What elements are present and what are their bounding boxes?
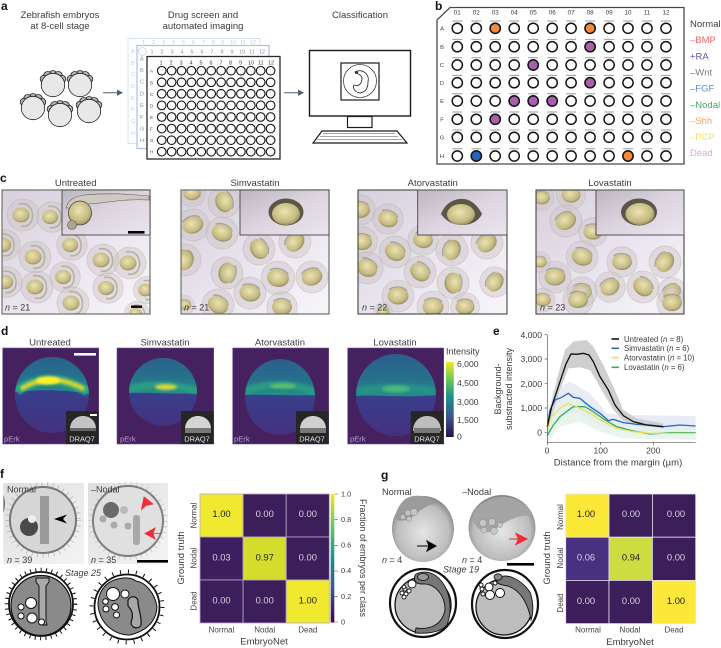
- heading: lovastatin: Lovastatin: [588, 178, 632, 189]
- legend: intensity colour bar: 1,500: [457, 415, 479, 425]
- row labels: Normal: [190, 502, 198, 528]
- image: pErk untreated: [3, 348, 99, 444]
- wells: [452, 23, 671, 161]
- column labels: [454, 10, 670, 16]
- front well plate: 2: [170, 60, 173, 66]
- label: –Nodal: [462, 487, 491, 497]
- image: atorvastatin embryos: [358, 190, 508, 314]
- panel: c, brightfield embryos: [0, 176, 684, 315]
- pErk label: pErk: [234, 434, 250, 444]
- column labels: 04: [511, 10, 518, 16]
- back well plate: 1: [142, 40, 145, 46]
- y axis title: Ground truth: [176, 531, 187, 585]
- row labels: C: [440, 63, 444, 69]
- confusion matrix: [200, 494, 329, 623]
- middle well plate: 12: [259, 50, 265, 56]
- chart legend: Atorvastatin (n = 10): [624, 354, 695, 362]
- confusion matrix: 1.00: [577, 508, 595, 519]
- y axis title: Ground truth: [542, 531, 553, 585]
- column labels: Nodal: [254, 626, 275, 634]
- back well plate: C: [131, 72, 135, 78]
- panel: b, screen plate results: [435, 0, 721, 164]
- colour bar title: Fraction of embryos per class: [358, 499, 368, 618]
- middle well plate: 6: [200, 50, 204, 56]
- middle well plate: 3: [170, 50, 174, 56]
- middle well plate: G: [140, 126, 144, 132]
- legend: intensity colour bar: 3,000: [457, 397, 479, 407]
- middle well plate: 9: [230, 50, 234, 56]
- row labels: D: [440, 81, 444, 87]
- panel letter g: g: [381, 468, 388, 482]
- n count: n = 23: [540, 302, 565, 312]
- colour bar with ticks: [331, 490, 351, 627]
- stage label: Stage 19: [443, 564, 479, 574]
- n count: n = 4: [462, 555, 482, 565]
- image: normal embryo stage 25: [3, 483, 84, 565]
- front well plate: [147, 56, 280, 159]
- heading: untreated: Untreated: [29, 338, 71, 348]
- x axis title: EmbryoNet: [606, 637, 654, 648]
- front well plate: 5: [200, 60, 203, 66]
- heading: lovastatin: Lovastatin: [373, 338, 417, 348]
- middle well plate: E: [140, 103, 144, 109]
- heading: zebrafish embryos: Zebrafish embryos: [21, 10, 99, 21]
- black arrow: [54, 514, 67, 524]
- legend: phenotype classes: [690, 19, 721, 159]
- y axis tick labels: 0: [537, 427, 542, 437]
- arrow: plate to classification: [284, 90, 303, 95]
- back well plate: 5: [182, 40, 185, 46]
- image: pErk atorvastatin: [233, 348, 329, 444]
- column labels: 03: [492, 10, 499, 16]
- x axis title: EmbryoNet: [240, 636, 288, 648]
- heading: classification: Classification: [332, 10, 388, 21]
- confusion matrix: 0.06: [577, 552, 595, 562]
- confusion matrix: 0.00: [622, 508, 640, 519]
- column labels: [209, 626, 317, 634]
- panel letter f: f: [0, 467, 5, 481]
- confusion matrix: 0.00: [667, 508, 685, 519]
- middle well plate: B: [140, 68, 144, 74]
- row labels: Normal: [556, 504, 565, 530]
- inset: atorvastatin embryo: [418, 190, 507, 235]
- row labels: Dead: [190, 591, 198, 611]
- heading: simvastatin: Simvastatin: [230, 178, 280, 189]
- y axis title: substracted intensity: [504, 347, 514, 430]
- icon: five 8-cell embryos: [20, 70, 102, 127]
- back well plate: 10: [230, 40, 236, 46]
- legend: phenotype classes: Dead: [690, 148, 713, 159]
- front well plate: E: [150, 115, 153, 120]
- middle well plate: 5: [190, 50, 194, 56]
- row labels: F: [440, 118, 444, 124]
- y axis tick labels: 1,000: [520, 403, 542, 413]
- heading: atorvastatin: Atorvastatin: [255, 338, 305, 348]
- black arrow: [417, 541, 436, 551]
- legend: intensity colour bar: 6,000: [457, 359, 479, 369]
- inset: lovastatin embryo: [596, 190, 684, 235]
- n count: n = 35: [91, 555, 116, 565]
- scale bar: [137, 560, 168, 563]
- row labels: [440, 26, 445, 160]
- back well plate: A: [131, 49, 135, 55]
- scale bar: [131, 306, 142, 308]
- colour bar with ticks: 0: [341, 618, 345, 627]
- n count: n = 39: [7, 555, 32, 565]
- middle well plate: [137, 46, 269, 148]
- middle well plate: D: [140, 92, 144, 98]
- row labels: H: [440, 154, 444, 160]
- DRAQ7 inset: DRAQ7: [414, 434, 440, 444]
- schematic: Nodal-inhibited: [472, 570, 538, 638]
- front well plate: 6: [210, 60, 213, 66]
- colour bar with ticks: 1.0: [341, 490, 351, 499]
- middle well plate: 2: [160, 50, 164, 56]
- column labels: 05: [530, 10, 537, 16]
- chart legend: [612, 335, 695, 372]
- column labels: 11: [644, 10, 651, 16]
- row labels: Nodal: [556, 547, 565, 568]
- column labels: 02: [473, 10, 480, 16]
- front well plate: H: [150, 150, 153, 155]
- DRAQ7 inset: DRAQ7: [69, 434, 95, 444]
- x axis tick labels: 200: [646, 446, 661, 456]
- stage label: Stage 25: [65, 568, 102, 578]
- column labels: Dead: [298, 626, 317, 634]
- front well plate: 1: [160, 60, 163, 66]
- back well plate: 8: [212, 40, 215, 46]
- confusion matrix: 1.00: [299, 594, 317, 606]
- legend: intensity colour bar: [446, 346, 480, 442]
- column labels: 06: [549, 10, 556, 16]
- line chart curves: [545, 335, 696, 445]
- confusion matrix: 0.00: [667, 552, 685, 562]
- n count: n = 21: [184, 302, 209, 312]
- middle well plate: A: [140, 56, 144, 62]
- n count: n = 22: [362, 302, 387, 312]
- column labels: Normal: [575, 626, 601, 634]
- n count: n = 21: [5, 302, 30, 312]
- label: Normal: [7, 484, 36, 494]
- pErk label: pErk: [4, 434, 20, 444]
- heading: zebrafish embryos: at 8-cell stage: [30, 21, 90, 32]
- legend: intensity colour bar: Intensity: [446, 346, 480, 356]
- heading: drug screen: Drug screen and: [168, 10, 238, 21]
- colour bar with ticks: 0.6: [341, 541, 351, 550]
- x axis tick labels: 100: [594, 446, 608, 456]
- legend: phenotype classes: +RA: [690, 52, 709, 63]
- legend: phenotype classes: –Wnt: [690, 68, 713, 79]
- colour bar with ticks: 0.8: [341, 515, 351, 524]
- column labels: 07: [568, 10, 575, 16]
- legend: phenotype classes: –FGF: [690, 84, 714, 95]
- confusion matrix: 0.97: [256, 552, 274, 562]
- chart legend: Untreated (n = 8): [624, 335, 684, 344]
- back well plate: 12: [250, 40, 256, 46]
- image: untreated embryos: [1, 189, 151, 315]
- DRAQ7 inset: DRAQ7: [184, 434, 210, 444]
- heading: drug screen: automated imaging: [163, 21, 243, 32]
- scale bar: [128, 231, 144, 234]
- column labels: Normal: [209, 626, 235, 634]
- column labels: 09: [606, 10, 613, 16]
- legend: phenotype classes: –PCP: [690, 132, 715, 143]
- red arrow: [509, 534, 527, 544]
- panel letter c: c: [0, 171, 7, 185]
- front well plate: 11: [258, 60, 264, 66]
- colour bar with ticks: 0.4: [341, 566, 351, 575]
- confusion matrix: 1.00: [667, 595, 685, 606]
- legend: phenotype classes: –Nodal: [690, 100, 720, 111]
- row labels: B: [440, 45, 444, 51]
- front well plate: 10: [248, 60, 254, 66]
- row labels: A: [440, 26, 444, 32]
- middle well plate: 4: [180, 50, 184, 56]
- middle well plate: H: [140, 138, 144, 144]
- middle well plate: 1: [150, 50, 154, 56]
- label: –Nodal: [91, 484, 120, 494]
- image: pErk simvastatin: [117, 348, 214, 444]
- red arrow heads: [142, 497, 162, 539]
- x axis title: Distance from the margin (µm): [554, 458, 682, 468]
- front well plate: 7: [220, 60, 223, 66]
- column labels: 10: [624, 10, 632, 16]
- confusion matrix: 0.00: [299, 552, 317, 562]
- legend: phenotype classes: –Shh: [690, 116, 712, 127]
- panel: e, intensity line chart: [493, 324, 696, 468]
- confusion matrix: 0.00: [212, 594, 231, 606]
- panel: d, pErk staining: [1, 324, 480, 444]
- front well plate: 8: [229, 60, 232, 66]
- back well plate: 9: [221, 40, 224, 46]
- column labels: Dead: [664, 626, 684, 634]
- image: lovastatin embryos: [536, 190, 684, 314]
- schematic: normal: [390, 569, 456, 637]
- confusion matrix: 0.00: [577, 595, 595, 606]
- scale bar: [74, 353, 96, 356]
- legend: phenotype classes: –BMP: [690, 35, 716, 46]
- row labels: E: [440, 99, 444, 105]
- back well plate: F: [131, 107, 135, 113]
- row labels: Nodal: [190, 547, 198, 568]
- DRAQ7 inset: DRAQ7: [299, 434, 325, 444]
- y axis tick labels: [520, 330, 542, 437]
- back well plate: 4: [172, 40, 175, 46]
- pErk label: pErk: [350, 434, 366, 444]
- back well plate: [128, 38, 260, 144]
- confusion matrix: 0.94: [622, 552, 640, 562]
- x axis tick labels: [545, 446, 661, 456]
- front well plate: 9: [239, 60, 242, 66]
- panel: f, stage 25 classification: [0, 467, 368, 648]
- column labels: 08: [587, 10, 594, 16]
- back well plate: H: [131, 131, 135, 137]
- back well plate: E: [131, 96, 135, 102]
- front well plate: 3: [180, 60, 183, 66]
- row labels: [190, 502, 198, 611]
- inset: simvastatin embryo: [240, 190, 329, 235]
- highlighted wells: [471, 23, 633, 161]
- heading: simvastatin: Simvastatin: [140, 338, 190, 348]
- middle well plate: C: [140, 80, 144, 86]
- scale bar: [507, 563, 534, 566]
- front well plate: A: [150, 69, 153, 74]
- legend: phenotype classes: Normal: [690, 19, 721, 30]
- back well plate: 7: [202, 40, 205, 46]
- confusion matrix: 0.00: [299, 508, 317, 519]
- schematic: normal: [6, 570, 76, 638]
- panel letter e: e: [493, 324, 500, 338]
- image: pErk lovastatin: [348, 348, 444, 444]
- back well plate: G: [131, 119, 135, 125]
- chart legend: Lovastatin (n = 6): [624, 363, 685, 372]
- front well plate: D: [150, 103, 154, 108]
- heading: atorvastatin: Atorvastatin: [408, 178, 458, 189]
- back well plate: D: [131, 84, 135, 90]
- label: Normal: [382, 487, 412, 497]
- heading: untreated: Untreated: [55, 178, 97, 189]
- row labels: Dead: [556, 593, 565, 613]
- confusion matrix: 0.00: [256, 508, 274, 519]
- back well plate: 11: [240, 40, 246, 46]
- back well plate: 6: [192, 40, 195, 46]
- column labels: 01: [454, 10, 461, 16]
- back well plate: 3: [162, 40, 165, 46]
- panel: a, screening workflow: [1, 0, 410, 159]
- arrow: embryos to plate: [103, 90, 122, 95]
- legend: intensity colour bar: 4,500: [457, 378, 479, 388]
- legend: intensity colour bar: 0: [457, 432, 462, 442]
- image: normal embryo stage 19: [382, 487, 454, 565]
- confusion matrix: 0.00: [622, 595, 640, 606]
- column labels: 12: [662, 10, 670, 16]
- column labels: [575, 626, 684, 634]
- compound name micro labels: [452, 21, 672, 149]
- chart legend: Simvastatin (n = 6): [624, 344, 690, 353]
- inset: untreated larva: [62, 190, 150, 235]
- middle well plate: 8: [220, 50, 224, 56]
- confusion matrix: 1.00: [212, 508, 231, 519]
- n count: n = 4: [382, 555, 402, 565]
- icon: computer with embryo on screen: [310, 50, 410, 143]
- middle well plate: F: [140, 115, 144, 121]
- row labels: [556, 504, 565, 613]
- x axis tick labels: 0: [545, 446, 550, 456]
- confusion matrix: [566, 494, 696, 624]
- plate outline: [437, 8, 684, 164]
- panel letter d: d: [1, 324, 8, 338]
- y axis title: Background-: [493, 363, 503, 415]
- y axis tick labels: 3,000: [520, 354, 542, 364]
- front well plate: F: [150, 127, 153, 132]
- front well plate: G: [150, 138, 154, 143]
- row labels: G: [440, 136, 445, 142]
- middle well plate: 11: [249, 50, 255, 56]
- schematic: Nodal-inhibited: [92, 572, 162, 642]
- front well plate: C: [150, 92, 154, 97]
- pErk label: pErk: [120, 434, 136, 444]
- colour bar with ticks: 0.2: [341, 592, 351, 601]
- middle well plate: 10: [239, 50, 245, 56]
- front well plate: 4: [190, 60, 193, 66]
- back well plate: 2: [152, 40, 155, 46]
- y axis tick labels: 4,000: [520, 330, 542, 340]
- column labels: Nodal: [620, 626, 641, 634]
- confusion matrix: 0.03: [212, 552, 231, 562]
- middle well plate: 7: [210, 50, 214, 56]
- image: simvastatin embryos: [180, 189, 330, 315]
- y axis tick labels: 2,000: [520, 379, 542, 389]
- front well plate: 12: [268, 60, 274, 66]
- front well plate: B: [150, 80, 153, 85]
- image: Nodal-inhibited embryo stage 25: [88, 483, 168, 565]
- image: Nodal-inhibited embryo stage 19: [462, 487, 536, 566]
- confusion matrix: 0.00: [256, 594, 274, 606]
- back well plate: B: [131, 61, 135, 67]
- panel: g, stage 19 classification: [381, 468, 696, 648]
